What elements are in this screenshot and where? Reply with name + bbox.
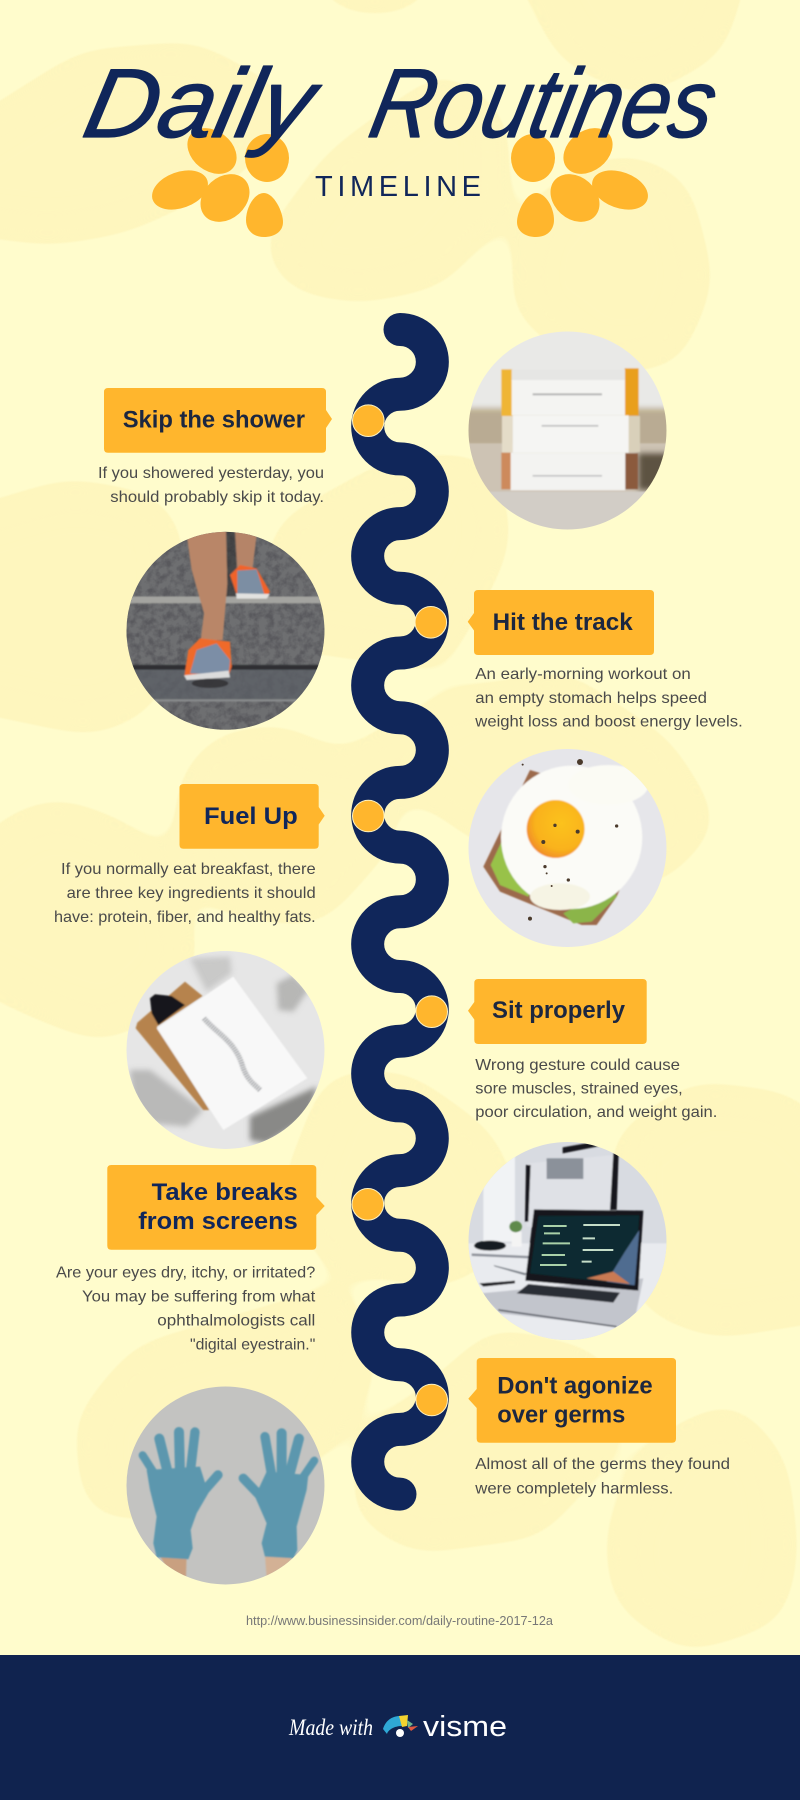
panel: sit properly: [468, 979, 717, 1121]
wave timeline: [368, 330, 432, 1494]
panel: don't agonize over germs: [468, 1358, 730, 1497]
photo: soap bars: [463, 330, 673, 533]
source link: http://www.businessinsider.com/daily-routine-2017-12a: [246, 1614, 553, 1628]
panel: hit the track: [468, 590, 743, 731]
heading: Fuel Up: [204, 803, 298, 830]
callout: [104, 388, 332, 453]
made with label: Made with: [288, 1715, 373, 1740]
panel: skip the shower: [98, 388, 332, 506]
title: Daily: [75, 49, 330, 159]
panel: fuel up: [54, 784, 325, 926]
heading: [138, 1179, 298, 1235]
text block: sore muscles, strained eyes,: [475, 1080, 683, 1097]
heading: Don't agonize: [497, 1372, 653, 1399]
text block: ophthalmologists call: [157, 1312, 315, 1329]
text block: If you showered yesterday, you: [98, 465, 324, 482]
text block: were completely harmless.: [474, 1480, 673, 1497]
icon: visme logo: [383, 1715, 418, 1737]
text block: have: protein, fiber, and healthy fats.: [54, 909, 316, 926]
heading: from screens: [138, 1208, 298, 1235]
icon: left flower petals: [147, 119, 289, 237]
text block: Wrong gesture could cause: [475, 1057, 680, 1074]
heading: over germs: [497, 1401, 625, 1428]
heading: [497, 1372, 653, 1428]
text block: Almost all of the germs they found: [475, 1456, 730, 1473]
photo: running legs on stairs: [123, 530, 330, 733]
text block: [98, 465, 324, 506]
photo: laptop on desk: [463, 1137, 673, 1343]
callout: [468, 590, 654, 655]
footer: [0, 1655, 800, 1800]
title: Routines: [361, 49, 727, 159]
text block: poor circulation, and weight gain.: [475, 1104, 717, 1121]
text block: an empty stomach helps speed: [475, 690, 707, 707]
heading: Sit properly: [492, 997, 626, 1024]
subtitle: TIMELINE: [315, 171, 481, 203]
callout: [107, 1165, 325, 1250]
callout: [468, 979, 647, 1044]
text block: Are your eyes dry, itchy, or irritated?: [56, 1264, 315, 1281]
text block: weight loss and boost energy levels.: [474, 714, 743, 731]
timeline dots: [352, 405, 448, 1416]
text block: If you normally eat breakfast, there: [61, 861, 316, 878]
panel: take breaks from screens: [56, 1165, 325, 1353]
text block: An early-morning workout on: [475, 666, 691, 683]
photo: egg on avocado toast: [468, 749, 666, 947]
text block: [475, 1057, 717, 1121]
visme wordmark: visme: [423, 1711, 507, 1743]
text block: are three key ingredients it should: [67, 885, 316, 902]
text block: [54, 861, 316, 926]
text block: "digital eyestrain.": [190, 1336, 315, 1353]
heading: Hit the track: [493, 609, 633, 636]
text block: You may be suffering from what: [82, 1289, 316, 1306]
heading: Take breaks: [152, 1179, 298, 1206]
callout: [468, 1358, 676, 1443]
photo: spine sketch on clipboard: [123, 948, 330, 1152]
icon: right flower petals: [511, 119, 653, 237]
text block: [474, 1456, 730, 1497]
heading: Skip the shower: [123, 407, 305, 434]
callout: [180, 784, 325, 849]
text block: [474, 666, 743, 731]
title: [75, 49, 727, 159]
photo: blue gloves: [123, 1383, 330, 1590]
text block: should probably skip it today.: [110, 489, 324, 506]
text block: [56, 1264, 316, 1353]
